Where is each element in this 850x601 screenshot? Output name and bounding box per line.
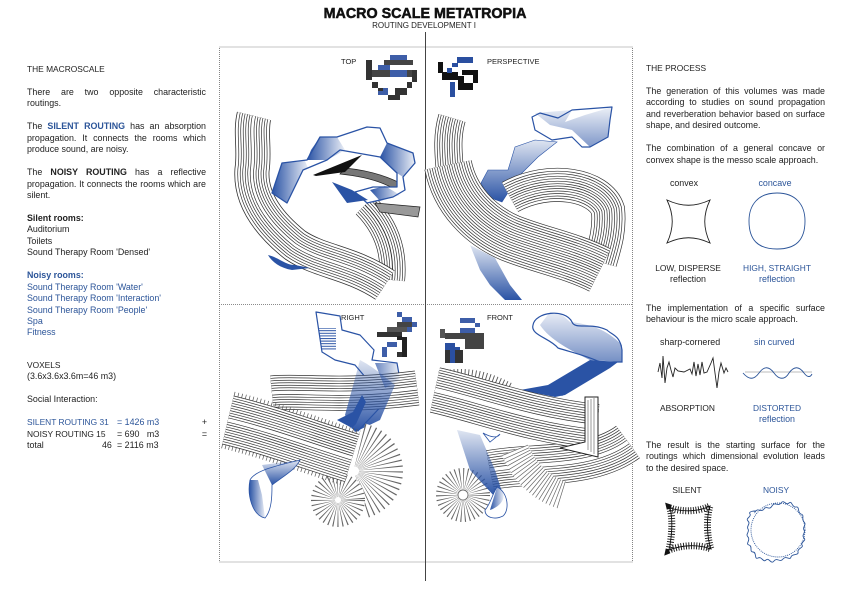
text: macroscale column: Sound Therapy Room 'People' xyxy=(27,305,147,315)
icon: perspective voxels xyxy=(438,57,478,97)
label: low disperse reflection: LOW, DISPERSE xyxy=(655,263,721,273)
text: the process intro xyxy=(646,63,825,165)
text: voxels xyxy=(27,360,116,404)
label: noisy: NOISY xyxy=(763,485,789,495)
label: low disperse reflection xyxy=(655,263,721,284)
table: routing volumes: total xyxy=(27,440,44,450)
drawing: top view routing xyxy=(252,116,420,285)
text: macroscale column: The SILENT ROUTING has an absorption xyxy=(27,121,206,131)
text: the process intro: The generation of this volumes was made xyxy=(646,86,825,96)
text: result: routings which dimensional evolution leads xyxy=(646,451,825,461)
label: distorted reflection: DISTORTED xyxy=(753,403,801,413)
text: voxels: Social Interaction: xyxy=(27,394,98,404)
text: the process intro: shape, and desired outcome. xyxy=(646,120,760,130)
text: macroscale column: routings. xyxy=(27,98,61,108)
label: absorption: ABSORPTION xyxy=(660,403,715,413)
text: the process intro: The combination of a general concave or xyxy=(646,143,825,153)
text: macroscale column: There are two opposite characteristic xyxy=(27,87,206,97)
table: routing volumes: 46 xyxy=(102,440,112,450)
label: high straight reflection xyxy=(743,263,811,284)
label: distorted reflection xyxy=(753,403,801,424)
table: routing volumes: + xyxy=(202,417,207,427)
label: concave: concave xyxy=(758,178,792,188)
view label: perspective: PERSPECTIVE xyxy=(487,57,540,66)
label: convex: convex xyxy=(670,178,698,188)
table: routing volumes: = 2116 m3 xyxy=(117,440,159,450)
text: result: to the desired space. xyxy=(646,463,728,473)
label: sin curved: sin curved xyxy=(754,337,794,347)
view label: top: TOP xyxy=(341,57,356,66)
diagram: silent surface xyxy=(669,506,711,550)
view label: right: RIGHT xyxy=(341,313,364,322)
subtitle: ROUTING DEVELOPMENT I xyxy=(372,21,476,30)
text: macroscale column: THE MACROSCALE xyxy=(27,64,105,74)
table: routing volumes: = 1426 m3 xyxy=(117,417,159,427)
label: high straight reflection: HIGH, STRAIGHT xyxy=(743,263,811,273)
text: macroscale column: Silent rooms: xyxy=(27,213,84,223)
drawing: right view routing xyxy=(228,312,417,518)
text: macroscale column: Sound Therapy Room 'Interaction' xyxy=(27,293,161,303)
title: MACRO SCALE METATROPIA xyxy=(324,6,526,22)
text: micro scale approach xyxy=(646,303,825,324)
text: macroscale column: Spa xyxy=(27,316,43,326)
drawing: perspective routing xyxy=(448,107,612,300)
diagram: concave shape xyxy=(749,193,805,249)
label: high straight reflection: reflection xyxy=(759,274,795,284)
text: macroscale column: Auditorium xyxy=(27,224,69,234)
text: micro scale approach: The implementation of a specific surface xyxy=(646,303,825,313)
label: distorted reflection: reflection xyxy=(759,414,795,424)
label: sharp-cornered: sharp-cornered xyxy=(660,337,720,347)
frame: dotted view grid xyxy=(219,32,632,581)
text: the process intro: according to studies on sound propagation xyxy=(646,97,825,107)
diagram: noisy surface xyxy=(747,502,805,562)
text: macroscale column: propagation. It connects the rooms which xyxy=(27,133,206,143)
text: the process intro: and reverberation behavior based on surface xyxy=(646,109,825,119)
text: the process intro: convex shape is the messo scale approach. xyxy=(646,155,818,165)
diagram: sharp-cornered wave xyxy=(658,356,728,388)
text: macroscale column: Noisy rooms: xyxy=(27,270,84,280)
text: macroscale column: Sound Therapy Room 'Densed' xyxy=(27,247,150,257)
text: macroscale column: produce sound, are noisy. xyxy=(27,144,128,154)
table: routing volumes: NOISY ROUTING 15 xyxy=(27,428,106,438)
text: result xyxy=(646,440,825,473)
text: voxels: VOXELS xyxy=(27,360,61,370)
table: routing volumes: SILENT ROUTING 31 xyxy=(27,417,109,427)
label: silent: SILENT xyxy=(672,485,702,495)
text: micro scale approach: behaviour is the micro scale approach. xyxy=(646,314,798,324)
icon: top voxels xyxy=(366,55,417,100)
text: macroscale column: The NOISY ROUTING has a reflective xyxy=(27,167,206,177)
diagram: sine wave xyxy=(743,368,812,378)
text: result: The result is the starting surface for the xyxy=(646,440,825,450)
table: routing volumes xyxy=(27,417,207,450)
label: low disperse reflection: reflection xyxy=(670,274,706,284)
text: macroscale column xyxy=(27,64,206,337)
view label: front: FRONT xyxy=(487,313,513,322)
table: routing volumes: = 690 m3 xyxy=(117,428,159,438)
text: macroscale column: Sound Therapy Room 'Water' xyxy=(27,282,143,292)
text: macroscale column: silent. xyxy=(27,190,50,200)
text: macroscale column: propagation. It connects the rooms which are xyxy=(27,179,206,189)
diagram: convex shape xyxy=(667,200,710,243)
text: the process intro: THE PROCESS xyxy=(646,63,706,73)
icon: front voxels xyxy=(440,318,484,363)
drawing: front view routing xyxy=(435,312,628,518)
text: macroscale column: Toilets xyxy=(27,236,52,246)
text: voxels: (3.6x3.6x3.6m=46 m3) xyxy=(27,371,116,381)
text: macroscale column: Fitness xyxy=(27,327,56,337)
table: routing volumes: = xyxy=(202,428,207,438)
icon: right voxels xyxy=(377,312,417,357)
